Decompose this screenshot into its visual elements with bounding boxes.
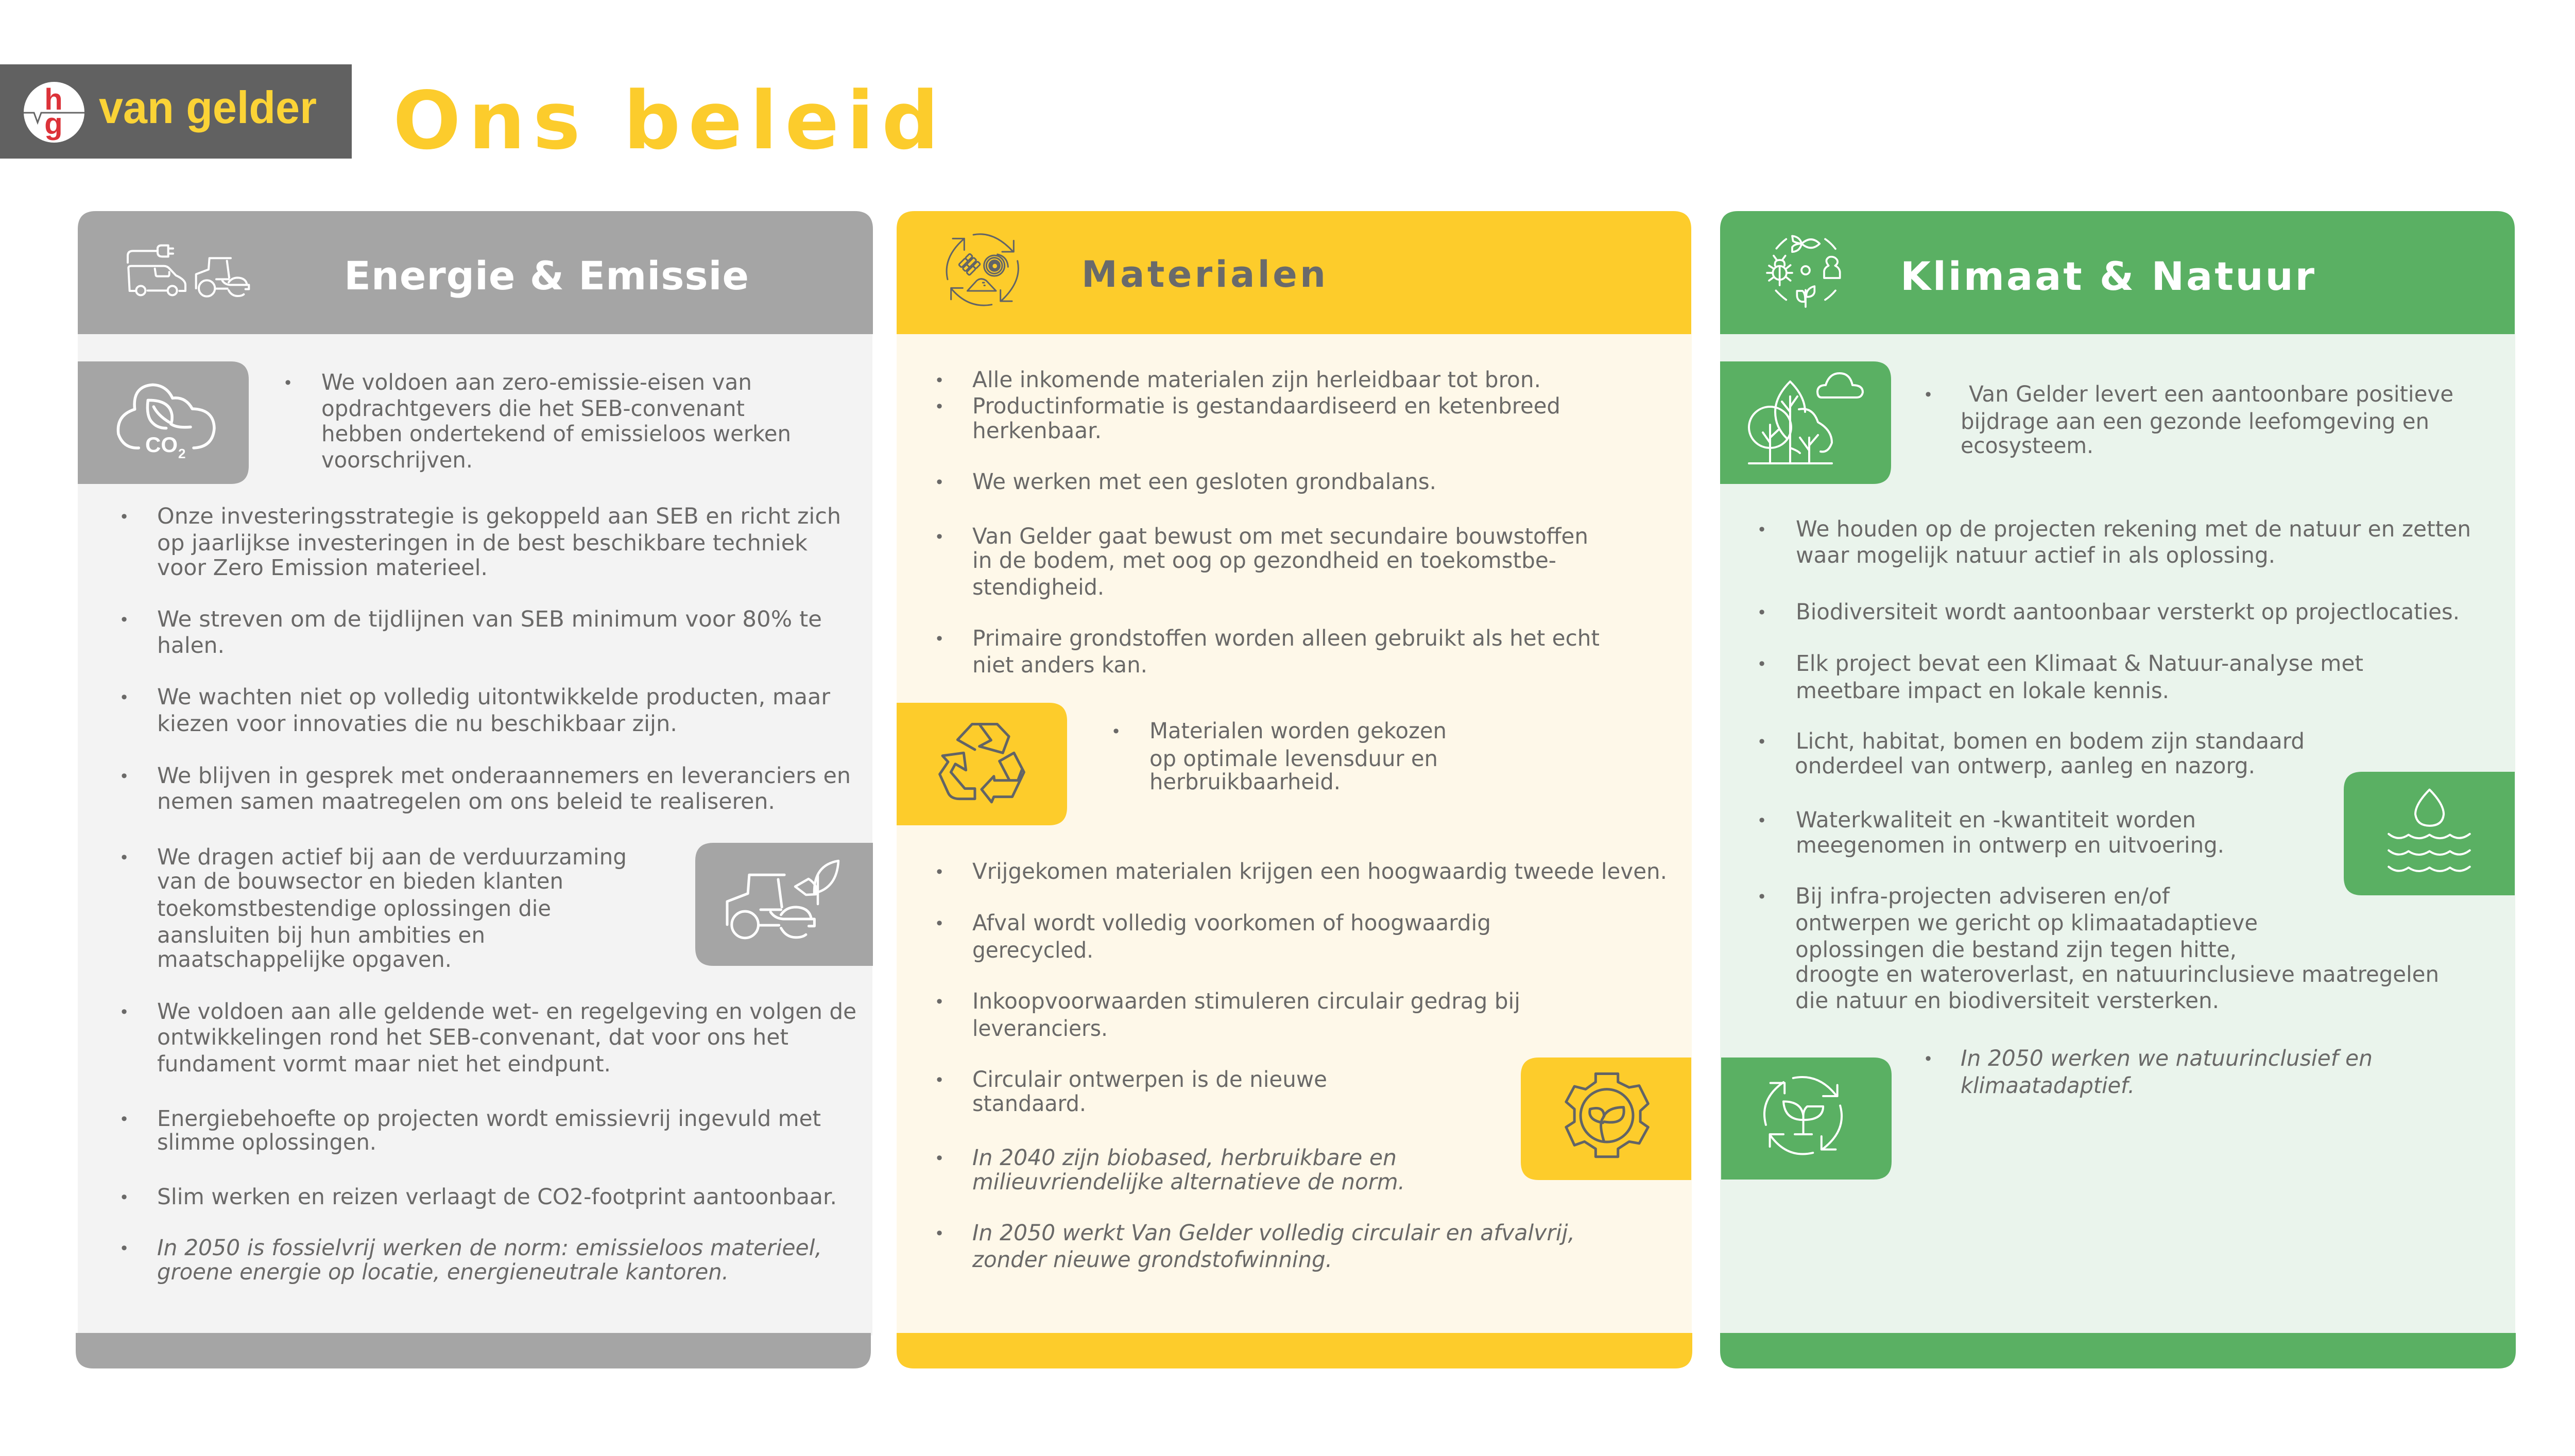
text block: •: [935, 371, 944, 390]
text block: [119, 844, 627, 972]
text block: Elk project bevat een Klimaat & Natuur-analyse met: [1796, 651, 2363, 676]
text block: [1924, 382, 2453, 458]
text block: op optimale levensduur en: [1149, 746, 1438, 771]
text block: Bij infra-projecten adviseren en/of: [1795, 883, 2170, 909]
text block: We blijven in gesprek met onderaannemers en leveranciers en: [157, 763, 851, 788]
text block: herbruikbaarheid.: [1149, 769, 1341, 794]
text block: [119, 606, 822, 658]
footer bar: [897, 1333, 1692, 1368]
text block: •: [119, 848, 129, 868]
text block: Productinformatie is gestandaardiseerd en ketenbreed: [972, 393, 1560, 419]
icon tile: trees and cloud: [1720, 361, 1891, 484]
text block: •: [119, 507, 129, 527]
text block: ambition 2050: •: [119, 1239, 129, 1258]
text block: •: [935, 862, 944, 882]
text block: [935, 626, 1600, 678]
text block: •: [935, 527, 944, 547]
text block: Van Gelder gaat bewust om met secundaire bouwstoffen: [972, 524, 1588, 549]
text block: Primaire grondstoffen worden alleen gebruikt als het echt: [972, 626, 1600, 651]
text block: die natuur en biodiversiteit versterken.: [1795, 988, 2219, 1013]
text block: •: [1757, 654, 1766, 674]
text block: slimme oplossingen.: [157, 1130, 376, 1155]
text block: Biodiversiteit wordt aantoonbaar versterkt op projectlocaties.: [1796, 599, 2460, 625]
text block: onderdeel van ontwerp, aanleg en nazorg.: [1795, 753, 2255, 778]
text block: Materialen worden gekozen: [1149, 718, 1447, 743]
text block: •: [1757, 603, 1766, 622]
text block: oplossingen die bestand zijn tegen hitte,: [1795, 937, 2237, 962]
panel heading: Klimaat & Natuur: [1900, 253, 2315, 299]
text block: •: [935, 397, 944, 417]
text block: •: [119, 1188, 129, 1207]
text block: ontwerpen we gericht op klimaatadaptieve: [1795, 910, 2258, 935]
text block: ambition 2050: In 2050 werken we natuurinclusief en: [1961, 1046, 2373, 1071]
text block: [1757, 651, 2363, 703]
text block: Energiebehoefte op projecten wordt emissievrij ingevuld met: [157, 1106, 821, 1131]
text block: ontwikkelingen rond het SEB-convenant, dat voor ons het: [157, 1025, 788, 1050]
logo: van gelder: [0, 64, 352, 159]
logo: van gelder: van gelder: [99, 82, 317, 133]
icon tile: plant cycle: [1721, 1058, 1892, 1180]
text block: ambition 2040: milieuvriendelijke alternatieve de norm.: [972, 1169, 1405, 1194]
text block: Van Gelder levert een aantoonbare positieve: [1969, 382, 2453, 407]
text block: stendigheid.: [972, 575, 1104, 600]
logo: van gelder: g: [44, 107, 63, 141]
text block: •: [935, 1070, 944, 1090]
text block: ambition 2050: In 2050 werkt Van Gelder volledig circulair en afvalvrij,: [972, 1220, 1575, 1245]
text block: Circulair ontwerpen is de nieuwe: [972, 1067, 1327, 1092]
text block: •: [1757, 887, 1766, 907]
text block: We voldoen aan alle geldende wet- en regelgeving en volgen de: [157, 999, 856, 1024]
icon tile: roller with plant: [695, 843, 873, 966]
panel header: Energie & Emissie: [78, 211, 873, 334]
text block: in de bodem, met oog op gezondheid en toekomstbe-: [972, 548, 1556, 573]
text block: [119, 504, 841, 580]
text block: •: [1757, 811, 1766, 830]
text block: meegenomen in ontwerp en uitvoering.: [1796, 833, 2224, 858]
text block: •: [119, 1002, 129, 1022]
text block: ambition 2050: groene energie op locatie, energieneutrale kantoren.: [157, 1259, 729, 1285]
text block: [1757, 883, 2439, 1013]
text block: Alle inkomende materialen zijn herleidbaar tot bron.: [972, 367, 1541, 392]
text block: nemen samen maatregelen om ons beleid te realiseren.: [157, 789, 775, 814]
icon tile: CO2 cloud: CO: [145, 432, 178, 457]
text block: •: [1757, 520, 1766, 540]
panel header: Klimaat & Natuur: [1720, 211, 2515, 334]
icon tile: CO2 cloud: [78, 361, 249, 484]
panel: Energie & Emissie: [76, 211, 873, 1368]
footer bar: [1720, 1333, 2516, 1368]
text block: hebben ondertekend of emissieloos werken: [321, 421, 791, 446]
text block: •: [119, 767, 129, 786]
text block: halen.: [157, 633, 225, 658]
icon tile: CO2 cloud: 2: [178, 446, 185, 461]
text block: •: [1924, 385, 1933, 405]
text block: •: [283, 373, 293, 393]
text block: [119, 1106, 821, 1155]
text block: •: [935, 992, 944, 1012]
text block: aansluiten bij hun ambities en: [157, 923, 485, 948]
text block: •: [935, 629, 944, 649]
text block: •: [119, 1110, 129, 1129]
title: Ons beleid: [393, 74, 939, 167]
panel header: Materialen: [897, 211, 1691, 334]
icon: electric van and road roller: [128, 246, 249, 297]
text block: droogte en wateroverlast, en natuurinclusieve maatregelen: [1795, 962, 2439, 987]
text block: ambition 2040: [935, 1145, 1405, 1194]
text block: op jaarlijkse investeringen in de best beschikbare techniek: [157, 530, 808, 556]
text block: ambition 2040: •: [935, 1149, 944, 1168]
text block: ambition 2050: [119, 1235, 822, 1285]
text block: voorschrijven.: [321, 447, 473, 473]
text block: Vrijgekomen materialen krijgen een hoogwaardig tweede leven.: [972, 859, 1667, 884]
text block: •: [1111, 722, 1121, 741]
text block: [119, 763, 851, 814]
icon tile: water drop and waves: [2344, 772, 2515, 895]
text block: kiezen voor innovaties die nu beschikbaar zijn.: [157, 711, 677, 736]
icon: material cycle: [947, 234, 1018, 305]
text block: ambition 2050: zonder nieuwe grondstofwinning.: [972, 1247, 1332, 1272]
text block: [1757, 807, 2224, 858]
text block: We voldoen aan zero-emissie-eisen van: [321, 370, 752, 395]
footer bar: [76, 1333, 871, 1368]
text block: [1111, 718, 1447, 794]
text block: We streven om de tijdlijnen van SEB minimum voor 80% te: [157, 606, 822, 632]
panel: Klimaat & Natuur: [1720, 211, 2516, 1368]
text block: •: [1757, 732, 1766, 752]
text block: [935, 393, 1560, 443]
text block: standaard.: [972, 1091, 1086, 1116]
text block: •: [935, 914, 944, 933]
text block: gerecycled.: [972, 938, 1093, 963]
text block: [935, 1067, 1327, 1116]
text block: We dragen actief bij aan de verduurzaming: [157, 844, 627, 870]
text block: maatschappelijke opgaven.: [157, 947, 452, 972]
logo: van gelder: h: [44, 83, 63, 116]
text block: [935, 989, 1520, 1041]
text block: Waterkwaliteit en -kwantiteit worden: [1796, 807, 2196, 833]
text block: ambition 2050: [1924, 1046, 2373, 1098]
text block: van de bouwsector en bieden klanten: [157, 869, 563, 894]
text block: fundament vormt maar niet het eindpunt.: [157, 1051, 611, 1077]
text block: •: [935, 473, 944, 492]
text block: [1757, 729, 2305, 778]
panel: Materialen: [897, 211, 1692, 1368]
text block: Onze investeringsstrategie is gekoppeld aan SEB en richt zich: [157, 504, 841, 529]
text block: ambition 2050: •: [935, 1224, 944, 1243]
text block: Slim werken en reizen verlaagt de CO2-footprint aantoonbaar.: [157, 1184, 837, 1209]
text block: [119, 684, 831, 736]
text block: Afval wordt volledig voorkomen of hoogwaardig: [972, 910, 1491, 935]
text block: We werken met een gesloten grondbalans.: [972, 469, 1436, 494]
icon: nature circle: [1767, 236, 1840, 307]
text block: [1757, 516, 2471, 568]
panel heading: Materialen: [1082, 253, 1326, 296]
text block: Inkoopvoorwaarden stimuleren circulair gedrag bij: [972, 989, 1520, 1014]
text block: We houden op de projecten rekening met de natuur en zetten: [1796, 516, 2471, 542]
text block: toekomstbestendige oplossingen die: [157, 896, 551, 921]
text block: niet anders kan.: [972, 652, 1147, 678]
text block: ambition 2050: •: [1924, 1049, 1933, 1069]
text block: bijdrage aan een gezonde leefomgeving en: [1961, 409, 2429, 434]
text block: ambition 2050: In 2050 is fossielvrij werken de norm: emissieloos materieel,: [157, 1235, 822, 1260]
text block: [283, 370, 791, 473]
text block: leveranciers.: [972, 1016, 1108, 1041]
text block: waar mogelijk natuur actief in als oplossing.: [1796, 543, 2275, 568]
icon tile: gear with sprout: [1521, 1058, 1691, 1180]
text block: herkenbaar.: [972, 418, 1102, 443]
text block: ecosysteem.: [1961, 433, 2093, 458]
text block: •: [119, 688, 129, 707]
text block: [119, 999, 856, 1077]
text block: opdrachtgevers die het SEB-convenant: [321, 396, 745, 421]
text block: ambition 2050: klimaatadaptief.: [1961, 1073, 2135, 1098]
text block: [935, 524, 1588, 600]
text block: We wachten niet op volledig uitontwikkelde producten, maar: [157, 684, 831, 709]
text block: meetbare impact en lokale kennis.: [1796, 678, 2169, 703]
icon tile: recycle: [897, 703, 1067, 825]
text block: voor Zero Emission materieel.: [157, 555, 488, 580]
text block: Licht, habitat, bomen en bodem zijn standaard: [1796, 729, 2305, 754]
text block: [935, 910, 1491, 963]
text block: ambition 2040: In 2040 zijn biobased, herbruikbare en: [972, 1145, 1397, 1170]
text block: •: [119, 610, 129, 630]
text block: ambition 2050: [935, 1220, 1575, 1272]
panel heading: Energie & Emissie: [344, 253, 749, 299]
